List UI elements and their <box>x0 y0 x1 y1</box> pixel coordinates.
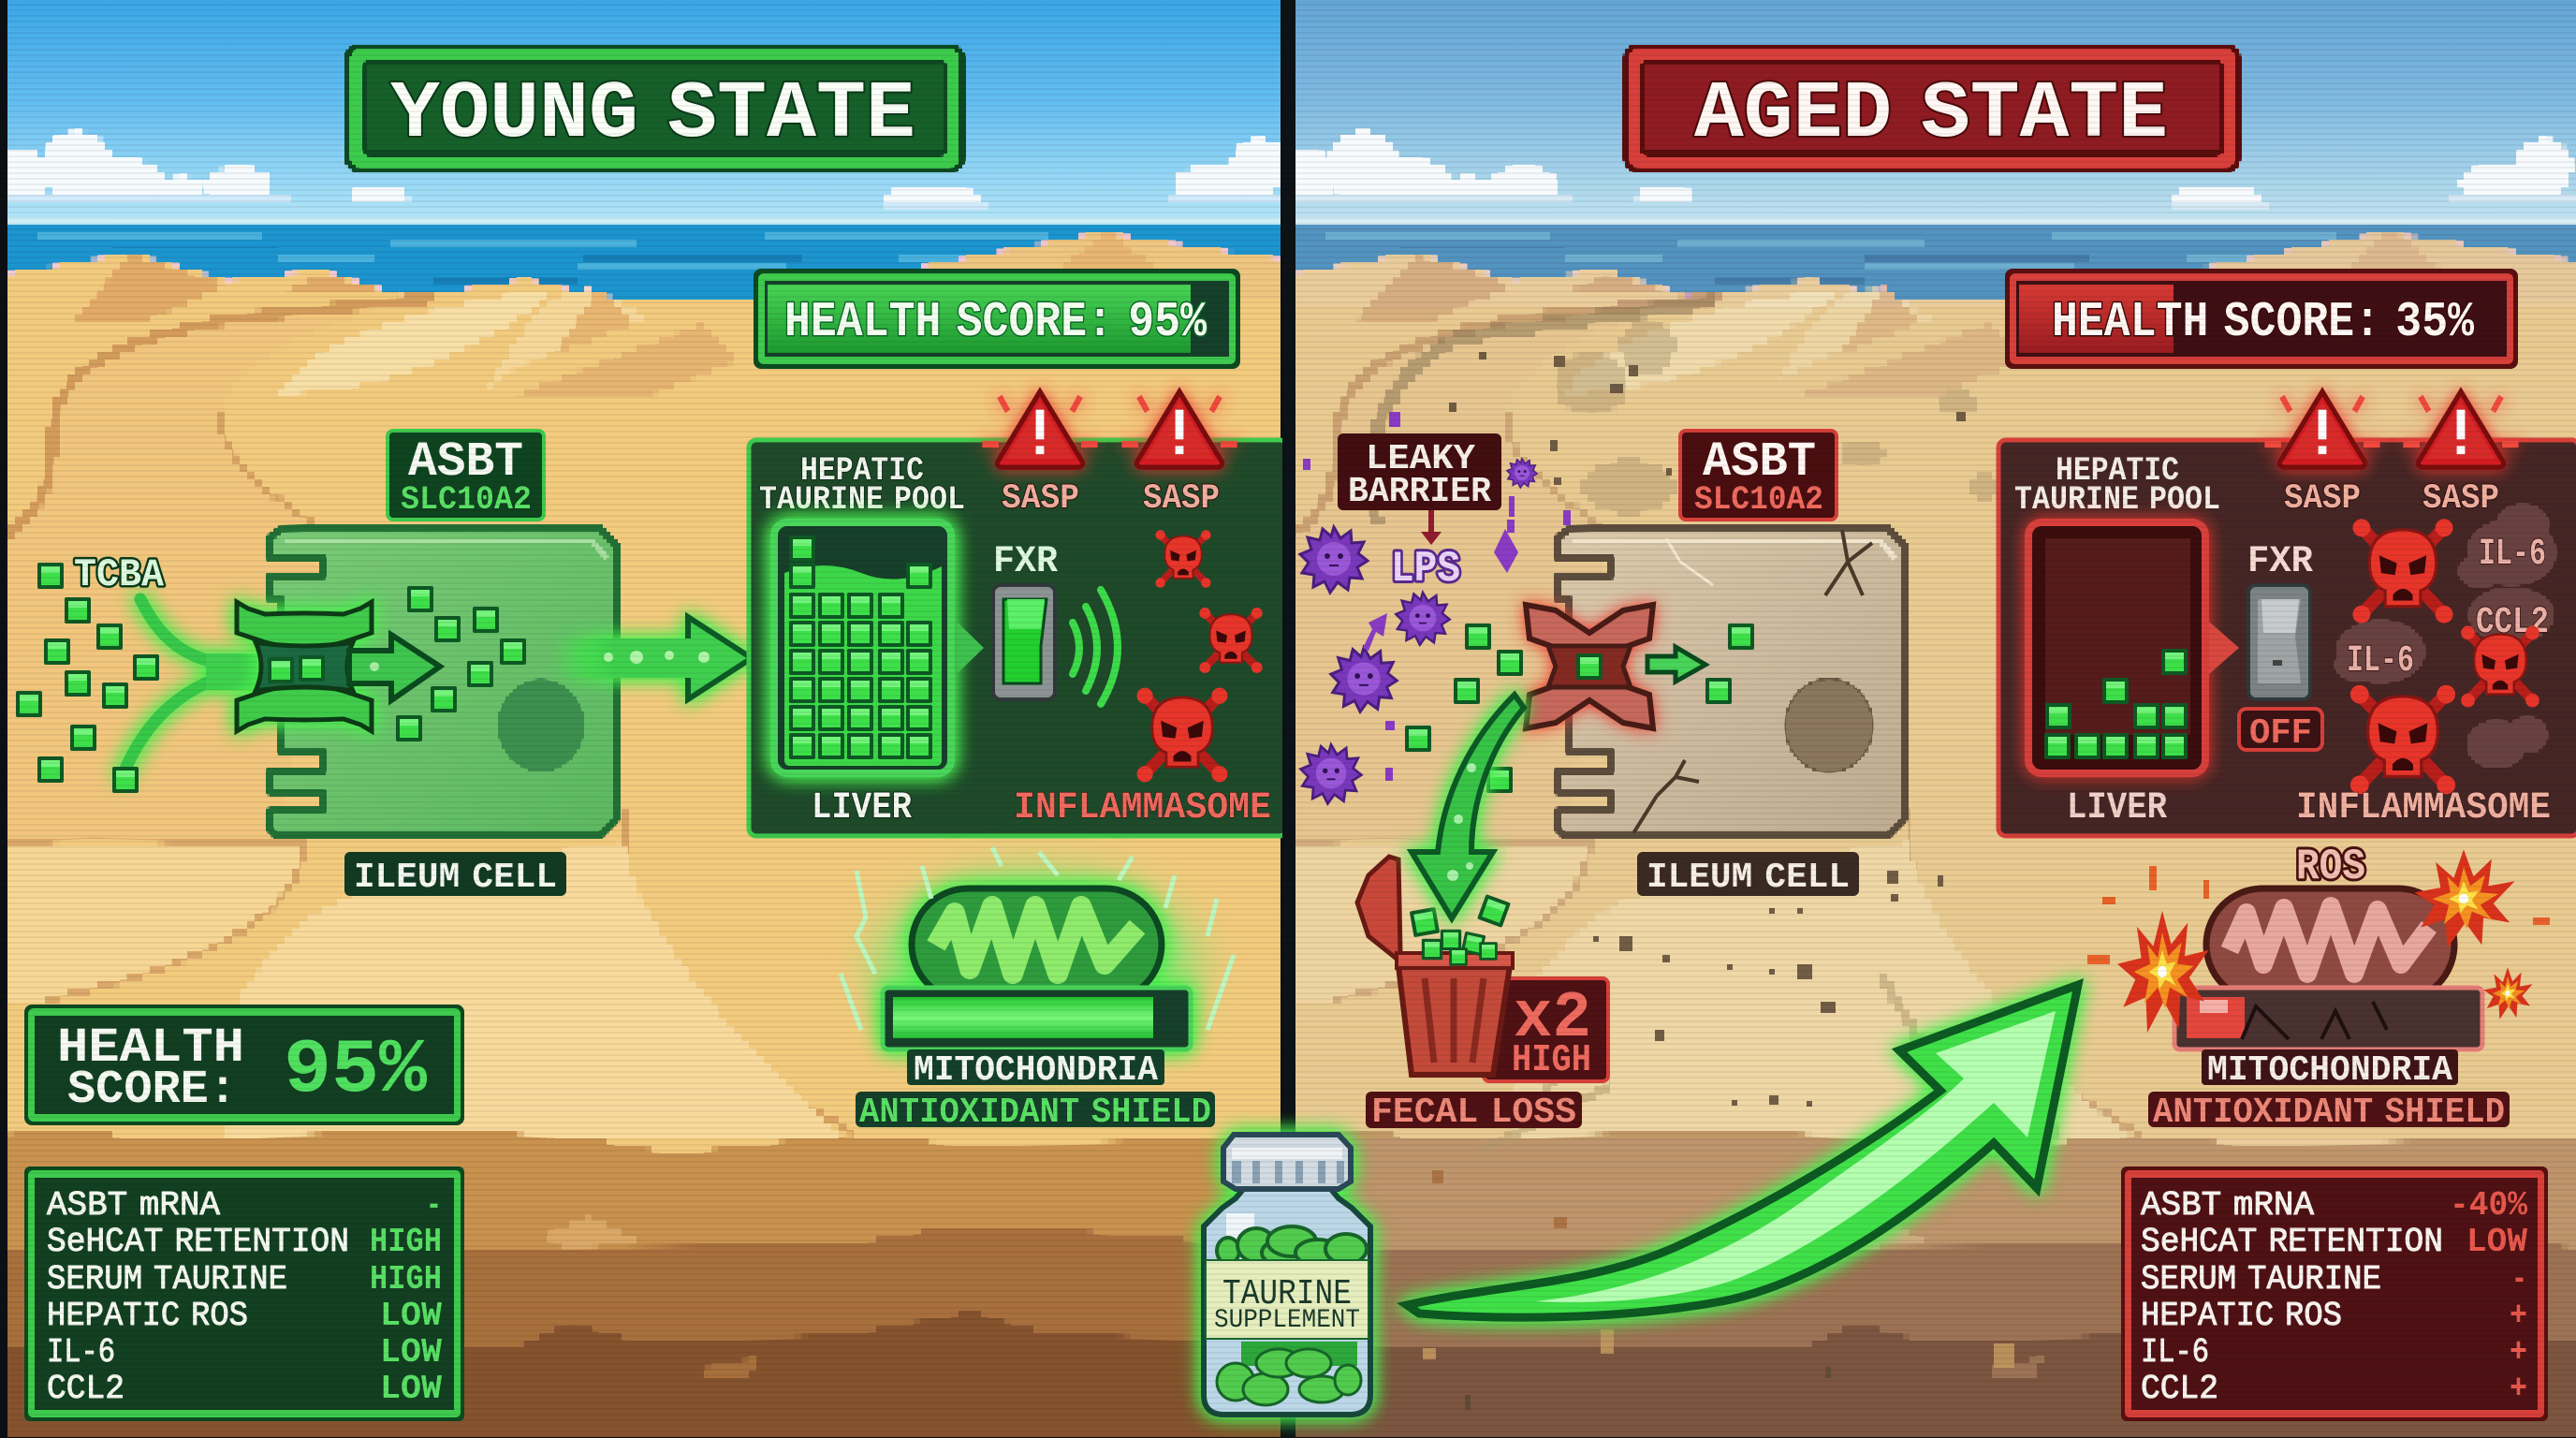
taurine squares: depleted tank <box>2044 649 2188 759</box>
label: ASBT young <box>388 431 544 520</box>
callout: x2 high <box>1484 978 1608 1082</box>
warning icons: aged <box>2264 391 2519 467</box>
viruses: LPS particles <box>1300 459 1537 803</box>
small arrow through transporter <box>349 635 440 700</box>
panel: liver and inflammasome young <box>749 440 1287 836</box>
label: OFF: OFF <box>2249 713 2312 754</box>
arrow to FXR aged <box>2209 622 2239 674</box>
table: aged biomarkers <box>2121 1167 2548 1421</box>
table: young biomarkers: HIGH <box>370 1223 442 1261</box>
liver tank <box>774 522 951 773</box>
divider between panels <box>1282 0 1295 1438</box>
health bar: young 95%: HEALTH SCORE: 95% <box>784 294 1207 350</box>
table: aged biomarkers: CCL2 <box>2141 1370 2218 1408</box>
cytokine labels <box>2347 534 2549 682</box>
table: aged biomarkers: -40% <box>2450 1186 2527 1225</box>
taurine squares: inside young cell <box>396 586 526 741</box>
heading: hepatic taurine pool aged: HEPATIC <box>2056 452 2179 490</box>
transporter: ASBT aged <box>1526 605 1653 728</box>
table: young biomarkers: LOW <box>380 1370 442 1408</box>
glow: mitochondria halo <box>872 871 1200 1067</box>
title: young state: YOUNG STATE <box>390 68 915 160</box>
label: ileum cell aged: ILEUM CELL <box>1647 858 1850 898</box>
table: young biomarkers: HIGH <box>370 1260 442 1299</box>
label: liver aged: LIVER <box>2067 787 2167 829</box>
cytokine labels: IL-6 <box>2479 534 2546 576</box>
label: FXR: FXR <box>993 541 1058 583</box>
mitochondria: aged <box>2174 888 2482 1049</box>
table: young biomarkers: HEPATIC ROS <box>47 1297 248 1335</box>
background: young beach scene <box>0 0 1288 1438</box>
table: aged biomarkers: HEPATIC ROS <box>2141 1297 2342 1335</box>
cytokine labels: IL-6 <box>2347 640 2414 682</box>
labels: SASP aged <box>2284 479 2499 519</box>
labels: SASP aged: SASP <box>2284 479 2361 519</box>
table: aged biomarkers: - <box>2511 1260 2527 1299</box>
table: young biomarkers: CCL2 <box>47 1370 124 1408</box>
label: leaky barrier <box>1338 433 1501 512</box>
health score box: HEALTH <box>57 1020 244 1076</box>
trash bin: fecal loss <box>1357 857 1513 1075</box>
title: aged state: AGED STATE <box>1694 68 2168 160</box>
heading: hepatic taurine pool <box>759 452 965 519</box>
health bar: aged 35% <box>2005 269 2518 369</box>
cracks: shield bar <box>2242 1002 2387 1039</box>
table: aged biomarkers: + <box>2510 1297 2527 1335</box>
warning icons: young <box>982 391 1237 467</box>
table: young biomarkers: ASBT mRNA <box>47 1186 220 1225</box>
liver tank: depleted <box>2028 522 2205 773</box>
label: liver: LIVER <box>812 787 912 829</box>
capsules: top <box>1217 1226 1367 1266</box>
ileum cell: aged <box>1559 528 1904 836</box>
bottle: taurine supplement <box>1204 1135 1370 1415</box>
bottle: taurine supplement: SUPPLEMENT <box>1214 1306 1360 1335</box>
label: mitochondria aged: MITOCHONDRIA <box>2207 1050 2452 1091</box>
explosions: ROS damage <box>2087 849 2550 1033</box>
arrow: supplement rescue <box>1407 985 2078 1317</box>
label: leaky barrier: BARRIER <box>1348 472 1491 512</box>
label: antioxidant shield aged: ANTIOXIDANT SHIELD <box>2153 1093 2505 1133</box>
table: young biomarkers <box>24 1167 464 1421</box>
table: young biomarkers: SERUM TAURINE <box>47 1260 287 1299</box>
switch: FXR off <box>2248 585 2310 699</box>
signal waves <box>1073 590 1118 704</box>
label: ROS: ROS <box>2296 843 2365 891</box>
label: OFF <box>2239 709 2322 754</box>
mitochondria: young <box>841 847 1234 1067</box>
health bar: young 95% <box>754 269 1240 369</box>
switch: FXR on <box>993 585 1055 699</box>
skulls: young inflammasome <box>1137 530 1263 782</box>
health score box: 95% <box>284 1027 428 1114</box>
small arrow: aged transporter <box>1647 647 1705 682</box>
heading: hepatic taurine pool: HEPATIC <box>800 452 924 490</box>
label: ileum cell young: ILEUM CELL <box>354 858 557 898</box>
label: inflammasome: INFLAMMASOME <box>1014 787 1271 829</box>
heading: hepatic taurine pool: TAURINE POOL <box>759 481 965 519</box>
label: mitochondria young: MITOCHONDRIA <box>914 1050 1158 1091</box>
label: inflammasome aged: INFLAMMASOME <box>2296 787 2551 829</box>
labels: SASP: SASP <box>1143 479 1220 519</box>
callout: x2 high: HIGH <box>1512 1039 1591 1082</box>
taurine grid <box>789 536 932 759</box>
label: FXR aged: FXR <box>2247 541 2313 583</box>
taurine squares: aged <box>1405 624 1754 793</box>
purple leak streaks <box>1303 412 1571 781</box>
aura: mitochondria energy <box>841 847 1234 1030</box>
label: ASBT young: ASBT <box>408 434 523 490</box>
table: aged biomarkers: SERUM TAURINE <box>2141 1260 2381 1299</box>
label: TCBA: TCBA <box>74 552 165 597</box>
arrow to FXR <box>957 622 984 674</box>
health score box <box>24 1005 464 1125</box>
table: aged biomarkers: ASBT mRNA <box>2141 1186 2314 1225</box>
panel: liver and inflammasome aged <box>1998 440 2576 836</box>
table: young biomarkers: SeHCAT RETENTION <box>47 1223 349 1261</box>
streams: TCBA into transporter <box>123 599 257 775</box>
cytokine labels: CCL2 <box>2476 602 2549 644</box>
table: aged biomarkers: SeHCAT RETENTION <box>2141 1223 2443 1261</box>
arrow: barrier to LPS <box>1421 510 1442 545</box>
label: fecal loss: FECAL LOSS <box>1371 1093 1576 1133</box>
bottle: taurine supplement: TAURINE <box>1222 1274 1352 1314</box>
label: leaky barrier: LEAKY <box>1366 439 1475 479</box>
labels: SASP aged: SASP <box>2422 479 2499 519</box>
background: aged beach scene <box>1280 0 2573 1438</box>
labels: SASP <box>1002 479 1220 519</box>
transporter: ASBT young <box>237 602 372 731</box>
label: ASBT aged <box>1680 431 1837 520</box>
heading: hepatic taurine pool aged <box>2014 452 2220 519</box>
arrow: ileum to liver <box>559 617 752 699</box>
table: young biomarkers: LOW <box>380 1297 442 1335</box>
table: aged biomarkers: LOW <box>2466 1223 2527 1261</box>
capsules: bottom <box>1217 1342 1361 1405</box>
title: young state <box>344 44 965 172</box>
label: ASBT aged: SLC10A2 <box>1694 481 1823 519</box>
taurine pile in bin <box>1410 894 1511 966</box>
cytokine clouds <box>2334 504 2556 769</box>
dirt specks: aged beach <box>1423 352 2014 1410</box>
table: young biomarkers: LOW <box>380 1333 442 1372</box>
callout: x2 high: x2 <box>1514 982 1591 1056</box>
label: LPS: LPS <box>1391 545 1460 594</box>
cracks: aged cell <box>1633 530 1872 833</box>
table: young biomarkers: - <box>426 1186 442 1225</box>
label: ASBT aged: ASBT <box>1703 434 1816 490</box>
labels: SASP: SASP <box>1002 479 1079 519</box>
heading: hepatic taurine pool aged: TAURINE POOL <box>2014 481 2220 519</box>
skulls: aged inflammasome <box>2350 519 2539 794</box>
table: aged biomarkers: + <box>2510 1370 2527 1408</box>
label: ASBT young: SLC10A2 <box>401 481 532 519</box>
table: young biomarkers: IL-6 <box>47 1333 115 1372</box>
table: aged biomarkers: + <box>2510 1333 2527 1372</box>
health bar: aged 35%: HEALTH SCORE: 35% <box>2052 294 2474 350</box>
title: aged state <box>1623 44 2241 172</box>
label: antioxidant shield young: ANTIOXIDANT SHIELD <box>859 1093 1211 1133</box>
arrow: taurine lost to bin <box>1412 695 1524 918</box>
ileum cell: young <box>271 528 616 836</box>
health score box: SCORE: <box>67 1064 237 1117</box>
taurine squares: young lumen <box>16 563 159 793</box>
table: aged biomarkers: IL-6 <box>2141 1333 2209 1372</box>
